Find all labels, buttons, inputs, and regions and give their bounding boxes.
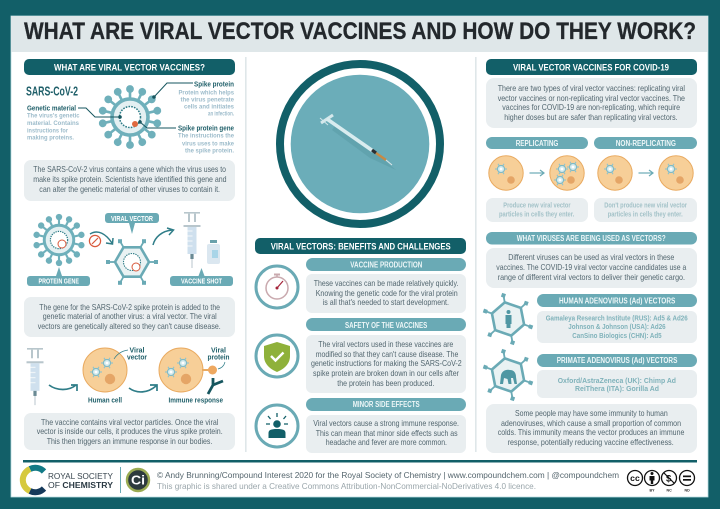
section: safety of the vaccines: spike protein are broken down in our cells after (313, 368, 459, 378)
section: minor side effects: This can mean that minor side effects such as (316, 428, 458, 438)
section: vaccine production: Knowing the genetic code for the viral protein (316, 288, 458, 298)
section: safety of the vaccines: genetic instructions for making the SARS-CoV-2 (311, 358, 462, 368)
diagram: non-replicating: NON-REPLICATING (616, 139, 676, 148)
diagram: immune response in human cell (26, 347, 230, 405)
subheading: what viruses are used (486, 232, 697, 244)
diagram: SARS-CoV-2 virus: SARS-CoV-2 (26, 84, 78, 98)
section: safety of the vaccines: The viral vectors used in these vaccines are (318, 339, 454, 349)
icon: Creative Commons licence badges: cc (630, 474, 640, 483)
section: primate adenovirus vectors: PRIMATE ADENOVIRUS (Ad) VECTORS (557, 356, 677, 365)
text block: gene added to vector: vectors are genetically altered so they can't cause disease. (38, 321, 221, 331)
logo: Royal Society of Chemistry (23, 467, 121, 493)
text block: spike protein gene explanation (24, 160, 235, 201)
diagram: SARS-CoV-2 virus: the spike protein. (185, 147, 234, 154)
panel: benefits and challenges (255, 238, 466, 453)
heading: covid-19 vaccines: VIRAL VECTOR VACCINES FOR COVID-19 (513, 63, 669, 74)
text block: vaccine produces spike protein: The vaccine contains viral vector particles. Once the viral (41, 417, 218, 427)
section: safety of the vaccines: the protein has been produced. (337, 378, 434, 388)
section: human adenovirus vectors: Johnson & Johnson (USA): Ad26 (568, 322, 666, 331)
text block: different viruses: range of different viral vectors to deliver their genetic cargo. (498, 272, 685, 282)
diagram: gene added to viral vector: PROTEIN GENE (38, 277, 79, 286)
text block: spike protein gene explanation: The SARS-CoV-2 virus contains a gene which the virus uses to (33, 164, 226, 174)
logo: Compound Interest: Ci (131, 474, 145, 488)
section: safety of the vaccines: SAFETY OF THE VACCINES (345, 321, 427, 330)
panel: what are viral vector vaccines (24, 59, 235, 450)
icon: Creative Commons licence badges (628, 470, 694, 492)
section: safety of the vaccines (306, 318, 466, 393)
text block: different viruses: Different viruses can be used as viral vectors in these (508, 252, 675, 262)
subheading: what viruses are used: WHAT VIRUSES ARE BEING USED AS VECTORS? (517, 234, 666, 243)
heading: what are viral vector vaccines (24, 59, 235, 75)
diagram: non-replicating: Don't produce new viral vector (604, 201, 687, 210)
text block: gene added to vector: The gene for the SARS-CoV-2 spike protein is added to the (39, 302, 220, 312)
icon: person with side effects (256, 405, 298, 447)
section: minor side effects: Viral vectors cause a strong immune response. (313, 418, 459, 428)
diagram: replicating: Produce new viral vector (503, 201, 571, 210)
diagram: immune response in human cell: protein (208, 355, 230, 362)
text block: vaccine produces spike protein: This then triggers an immune response in our bodies. (47, 436, 212, 446)
icon: Creative Commons licence badges: ND (684, 488, 690, 492)
logo: Royal Society of Chemistry: ROYAL SOCIETY (48, 472, 114, 481)
credit text (157, 470, 619, 491)
section: vaccine production: VACCINE PRODUCTION (350, 260, 423, 269)
diagram: gene added to viral vector: VIRAL VECTOR (111, 214, 153, 223)
diagram: SARS-CoV-2 virus: making proteins. (27, 134, 74, 141)
icon: Creative Commons licence badges: $ (666, 474, 672, 484)
section: vaccine production: These vaccines can be made relatively quickly. (314, 278, 458, 288)
diagram: SARS-CoV-2 virus: Genetic material (27, 106, 76, 112)
diagram: SARS-CoV-2 virus: Protein which helps (178, 89, 234, 96)
diagram: gene added to viral vector: VACCINE SHOT (181, 277, 222, 286)
diagram: SARS-CoV-2 virus: The virus's genetic (27, 113, 80, 120)
text block: two types (486, 78, 697, 128)
text block: gene added to vector: genetic material of another virus: a viral vector. The viral (43, 311, 217, 321)
icon: human adenovirus hexagon (476, 289, 540, 349)
icon: primate adenovirus hexagon (476, 345, 540, 405)
text block: two types: vaccines for COVID-19 are non-replicating, which require (502, 102, 680, 112)
photo: syringe in circle (280, 64, 440, 224)
section: primate adenovirus vectors: ReiThera (ITA): Gorilla Ad (575, 384, 659, 393)
heading: benefits and challenges: VIRAL VECTORS: BENEFITS AND CHALLENGES (271, 242, 451, 253)
diagram: SARS-CoV-2 virus: cells and initiates (184, 103, 234, 110)
diagram: replicating: particles in cells they enter. (499, 210, 574, 219)
icon: Creative Commons licence badges: BY (650, 488, 655, 492)
text block: two types: higher doses but are safer than replicating viral vectors. (504, 112, 678, 122)
text block: gene added to vector (24, 297, 235, 337)
icon: safety shield (256, 335, 298, 377)
text block: immunity: adenoviruses, which cause a small proportion of common (501, 418, 681, 428)
text block: two types: vector vaccines or non-replicating viral vector vaccines. The (498, 93, 685, 103)
diagram: SARS-CoV-2 virus: material. Contains (27, 120, 79, 127)
diagram: non-replicating (594, 137, 697, 222)
heading: benefits and challenges (255, 238, 466, 254)
section: human adenovirus vectors: HUMAN ADENOVIRUS (Ad) VECTORS (559, 296, 675, 306)
text block: spike protein gene explanation: can alter the genetic material of other viruses to contain it. (39, 184, 220, 194)
text block: immunity (486, 404, 697, 453)
diagram: SARS-CoV-2 virus: Spike protein (194, 81, 234, 88)
text block: immunity: response, potentially reducing vaccine effectiveness. (508, 437, 674, 447)
diagram: SARS-CoV-2 virus: instructions for (27, 127, 68, 134)
diagram: non-replicating: particles in cells they enter. (608, 210, 683, 219)
diagram: SARS-CoV-2 virus: virus uses to make (182, 140, 234, 147)
icon: Creative Commons licence badges: NC (666, 488, 672, 492)
section: vaccine production: is all that's needed to start development. (323, 297, 449, 307)
diagram: immune response in human cell: vector (127, 355, 147, 362)
text block: vaccine produces spike protein: vector is inside our cells, it produces the virus spike protein. (37, 426, 223, 436)
text block: immunity: Some people may have some immunity to human (515, 408, 668, 418)
logo: Royal Society of Chemistry: OF CHEMISTRY (48, 481, 114, 490)
credit text: This graphic is shared under a Creative Commons Attribution-NonCommercial-NoDerivatives 4.0 licence. (157, 481, 536, 491)
section: human adenovirus vectors (537, 294, 697, 343)
section: minor side effects (306, 398, 466, 453)
text block: vaccine produces spike protein (24, 413, 235, 450)
text block: spike protein gene explanation: make its spike protein. Scientists have identified this gene and (33, 174, 227, 184)
diagram: replicating: REPLICATING (516, 139, 558, 148)
credit text: © Andy Brunning/Compound Interest 2020 for the Royal Society of Chemistry | www.compoundchem.com | @compoundchem (157, 470, 619, 480)
heading: what are viral vector vaccines: WHAT ARE VIRAL VECTOR VACCINES? (54, 63, 205, 74)
section: safety of the vaccines: modified so that they can't cause disease. The (316, 349, 459, 359)
text block: different viruses (486, 248, 697, 288)
diagram: SARS-CoV-2 virus: the virus penetrate (180, 96, 234, 103)
diagram: SARS-CoV-2 virus: The instructions the (178, 132, 234, 139)
diagram: immune response in human cell: Viral (130, 347, 145, 354)
section: minor side effects: headache and fever are more common. (326, 437, 447, 447)
section: primate adenovirus vectors: Oxford/AstraZeneca (UK): Chimp Ad (558, 376, 676, 385)
diagram: immune response in human cell: Immune response (168, 397, 223, 404)
panel: viral vector vaccines for covid-19 (476, 59, 697, 453)
section: human adenovirus vectors: CanSino Biologics (CHN): Ad5 (572, 331, 662, 340)
diagram: SARS-CoV-2 virus: Spike protein gene (178, 125, 234, 132)
footer (23, 460, 697, 493)
diagram: gene added to viral vector (27, 212, 233, 286)
text block: immunity: colds. This immunity means the vector produces an immune (498, 427, 685, 437)
diagram: replicating (486, 137, 588, 222)
section: primate adenovirus vectors (537, 354, 697, 398)
text block: two types: There are two types of viral vector vaccines: replicating viral (498, 83, 685, 93)
diagram: immune response in human cell: Viral (211, 347, 226, 354)
section: minor side effects: MINOR SIDE EFFECTS (353, 400, 420, 409)
diagram: immune response in human cell: Human cell (88, 397, 122, 404)
diagram: SARS-CoV-2 virus (26, 81, 234, 154)
logo: Compound Interest (127, 469, 149, 491)
icon: stopwatch (256, 266, 298, 308)
heading: covid-19 vaccines (486, 59, 697, 75)
section: human adenovirus vectors: Gamaleya Research Institute (RUS): Ad5 & Ad26 (546, 313, 688, 322)
section: vaccine production (306, 258, 466, 313)
diagram: SARS-CoV-2 virus: an infection. (208, 110, 234, 117)
